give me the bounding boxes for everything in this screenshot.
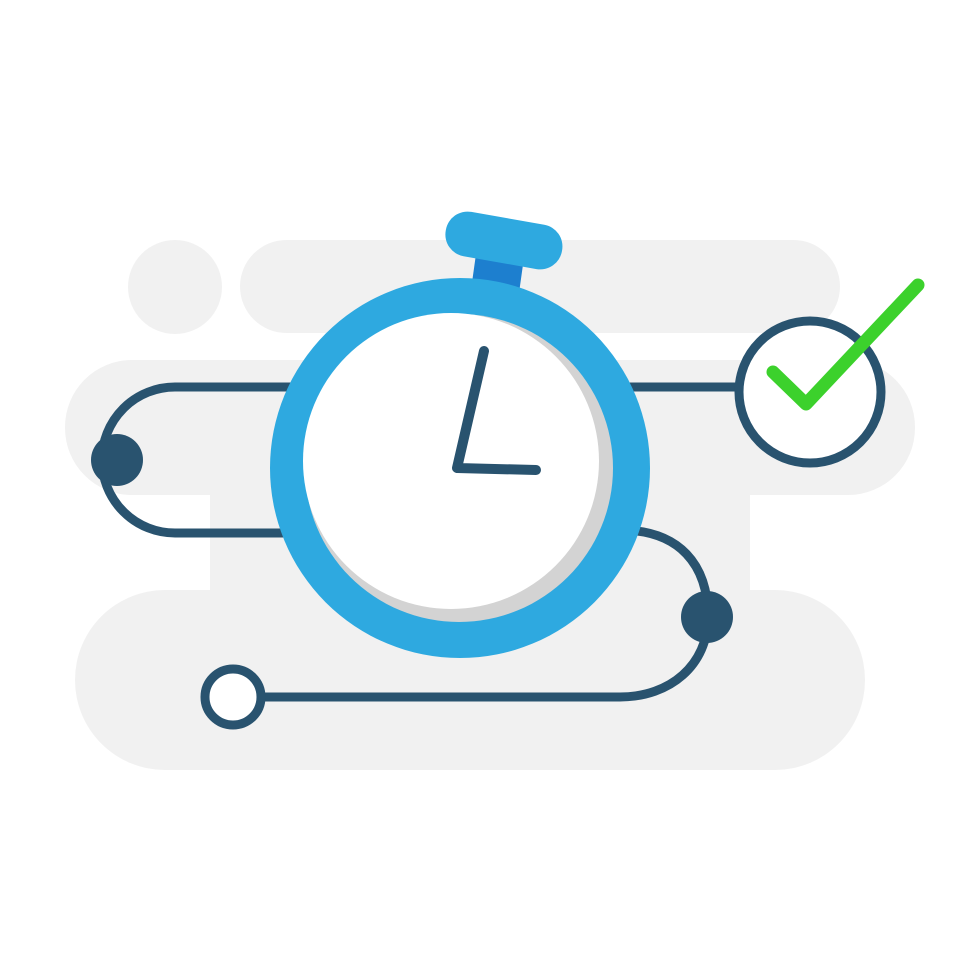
icon: check mark <box>773 285 918 404</box>
stopwatch <box>270 208 650 658</box>
stopwatch stem <box>471 247 525 298</box>
dial face <box>303 313 599 609</box>
timeline path <box>102 387 740 697</box>
clock hands <box>457 351 536 470</box>
node: start open circle <box>205 669 261 725</box>
stopwatch ring <box>270 278 650 658</box>
dial shadow <box>305 314 613 622</box>
node: left filled dot <box>91 434 143 486</box>
stopwatch button <box>442 208 566 273</box>
node: finish circle <box>739 321 881 463</box>
background blobs <box>65 240 915 770</box>
node: right filled dot <box>681 591 733 643</box>
